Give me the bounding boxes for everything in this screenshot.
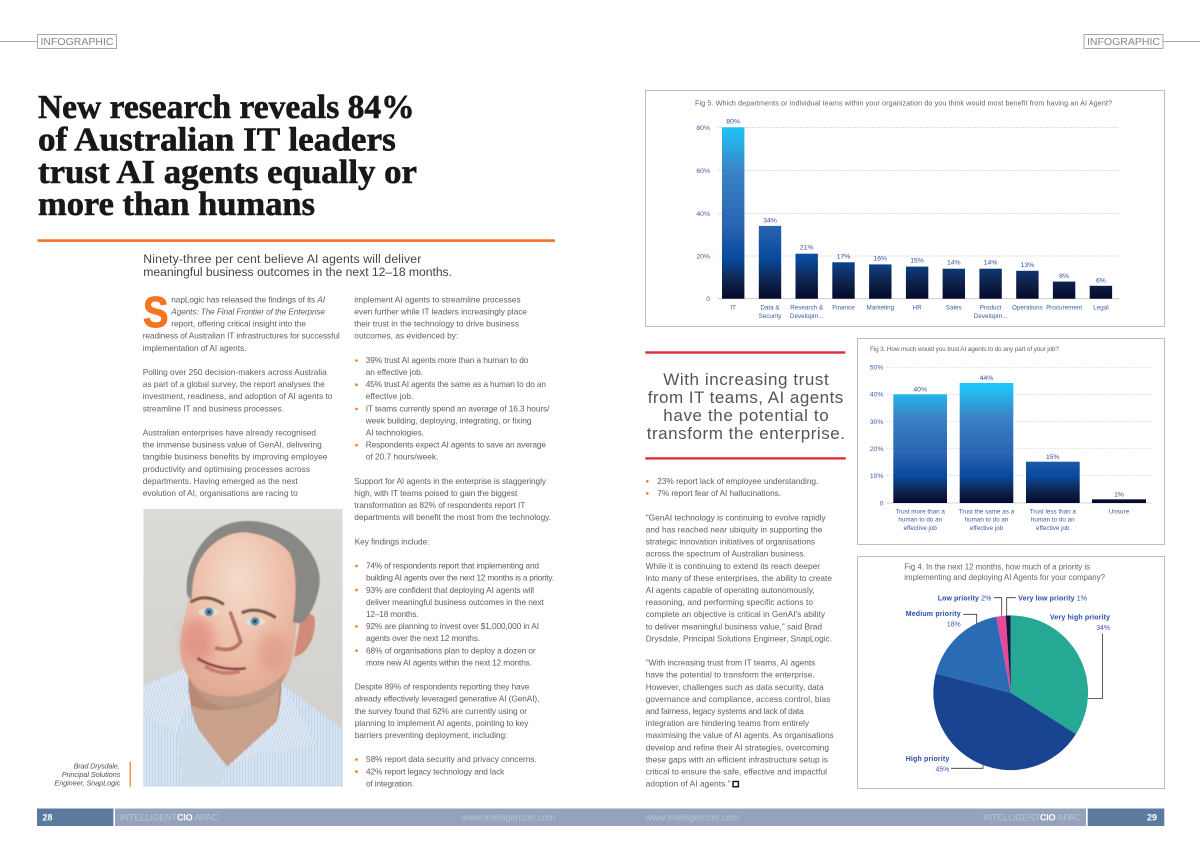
bar categories: effective job bbox=[970, 525, 1004, 532]
text block: polling paragraph bbox=[143, 367, 333, 413]
bullet list: barriers: 42% report legacy technology and lack bbox=[366, 766, 505, 776]
bullet list: key findings: 93% are confident that deploying AI agents will bbox=[366, 585, 534, 595]
bar values: 21% bbox=[800, 245, 814, 252]
bullet list: trust statistics: of 20.7 hours/week. bbox=[366, 452, 438, 462]
bullet list: further barriers: 23% report lack of employee understanding. bbox=[657, 476, 818, 486]
bullet list: key findings: 92% are planning to invest over $1,000,000 in AI bbox=[366, 621, 539, 631]
left website: www.intelligentcio.com bbox=[461, 812, 555, 822]
text block: closing quote: and fairness, legacy systems and lack of data bbox=[646, 706, 804, 716]
title: New research reveals 84% bbox=[38, 89, 415, 126]
text block: column 2 intro: implement AI agents to streamline processes bbox=[354, 294, 521, 304]
bullet list: key findings bbox=[355, 561, 554, 667]
text block: column 2 intro: their trust in the technology to drive business bbox=[354, 319, 519, 329]
bullet list: trust statistics: Respondents expect AI agents to save an average bbox=[366, 440, 546, 450]
text block: closing quote: However, challenges such as data security, data bbox=[646, 682, 824, 692]
caption accent line bbox=[130, 762, 131, 787]
bar categories bbox=[895, 508, 1130, 532]
bullet list: barriers bbox=[355, 754, 537, 788]
section tag: right INFOGRAPHIC: INFOGRAPHIC bbox=[1087, 36, 1160, 48]
bar categories: Unsure bbox=[1109, 508, 1130, 515]
y axis and gridlines: 20% bbox=[870, 446, 884, 453]
y axis and gridlines: 40% bbox=[696, 211, 710, 218]
chart title: Fig 4: Fig 4. In the next 12 months, how much of a priority is bbox=[904, 563, 1090, 572]
orange title rule bbox=[38, 239, 555, 242]
y axis and gridlines: 50% bbox=[870, 365, 884, 372]
red rule below pull quote bbox=[645, 457, 846, 460]
text block: GenAI quote: to deliver meaningful business value," said Brad bbox=[646, 621, 822, 631]
text block: polling paragraph: investment, readiness, and adoption of AI agents to bbox=[143, 391, 333, 401]
end mark square bbox=[733, 782, 738, 787]
text block: intro paragraph: napLogic has released the findings of its AI bbox=[171, 294, 326, 304]
text block: intro paragraph: readiness of Australian IT infrastructures for successful bbox=[143, 331, 340, 341]
text block: column 2 intro bbox=[354, 294, 527, 341]
chart title: Fig 3: Fig 3. How much would you trust AI agents to do any part of your job? bbox=[870, 346, 1059, 353]
text block: barriers paragraph: planning to implement AI agents, pointing to key bbox=[355, 718, 529, 728]
pie labels: High priority bbox=[906, 756, 949, 763]
text block: barriers paragraph bbox=[355, 682, 539, 740]
pie labels: Very high priority bbox=[1050, 614, 1110, 622]
bar categories: Developm... bbox=[974, 313, 1008, 320]
y axis and gridlines bbox=[870, 365, 1152, 507]
title: of Australian IT leaders bbox=[38, 122, 396, 158]
bar categories: Security bbox=[759, 313, 782, 320]
bar values: 44% bbox=[980, 375, 993, 382]
text block: GenAI quote: "GenAI technology is continuing to evolve rapidly bbox=[646, 512, 827, 522]
bar categories: human to do an bbox=[898, 517, 943, 524]
text block: closing quote: critical to ensure the safe, effective and impactful bbox=[646, 766, 827, 776]
bar categories: Data & bbox=[760, 304, 780, 311]
bar values: 14% bbox=[947, 260, 961, 267]
bullet list: trust statistics: week building, deploying, integrating, or fixing bbox=[365, 415, 532, 425]
chart title: Fig 5: Fig 5. Which departments or individual teams within your organization do you think would most benefit from having an AI Agent? bbox=[695, 98, 1112, 107]
bullet list: key findings: 68% of organisations plan to deploy a dozen or bbox=[366, 645, 536, 655]
text block: GenAI quote: across the spectrum of Australian business. bbox=[646, 549, 806, 559]
text block: intro paragraph: Agents: The Final Frontier of the Enterprise bbox=[170, 306, 325, 316]
text block: intro paragraph: implementation of AI agents. bbox=[143, 343, 246, 353]
bar values bbox=[726, 118, 1106, 284]
bar categories bbox=[730, 304, 1109, 320]
pie labels: 34% bbox=[1096, 625, 1110, 632]
pull quote bbox=[647, 370, 845, 443]
text block: GenAI quote: AI agents capable of operating autonomously, bbox=[646, 585, 815, 595]
text block: GenAI quote: While it is continuing to extend its reach deeper bbox=[646, 561, 820, 571]
bullet list: trust statistics: 39% trust AI agents more than a human to do bbox=[366, 355, 529, 365]
bar categories: Marketing bbox=[866, 304, 895, 311]
bar values: 13% bbox=[1021, 262, 1034, 269]
bar values: 1% bbox=[1114, 492, 1124, 499]
text block: GenAI quote: reasoning, and performing specific actions to bbox=[646, 597, 813, 607]
text block: intro paragraph: report, offering critical insight into the bbox=[171, 319, 306, 329]
bars bbox=[893, 383, 1146, 503]
bar categories: human to do an bbox=[965, 517, 1009, 524]
text block: closing quote: develop and refine their AI strategies, overcoming bbox=[646, 742, 829, 752]
pie leader lines bbox=[951, 598, 1102, 768]
text block: closing quote: "With increasing trust from IT teams, AI agents bbox=[646, 658, 815, 668]
text block: enterprises paragraph: the immense business value of GenAI, delivering bbox=[143, 440, 322, 450]
left publication name: INTELLIGENTCIO APAC bbox=[120, 812, 218, 822]
text block: GenAI quote: complete an objective is critical in GenAI's ability bbox=[646, 609, 826, 619]
text block: barriers paragraph: the survey found that 62% are currently using or bbox=[355, 706, 527, 716]
bar values: 16% bbox=[873, 256, 887, 263]
bullet list: trust statistics bbox=[355, 355, 550, 462]
bullet list: barriers: 58% report data security and privacy concerns. bbox=[366, 754, 537, 764]
text block: closing quote: adoption of AI agents." bbox=[646, 779, 731, 789]
text block: support paragraph bbox=[354, 476, 551, 522]
text block: enterprises paragraph: departments. Having emerged as the next bbox=[143, 476, 298, 486]
section tag: right INFOGRAPHIC bbox=[1084, 34, 1200, 48]
bars bbox=[722, 127, 1112, 299]
photo caption: Principal Solutions bbox=[62, 770, 121, 779]
bar categories: Trust less than a bbox=[1030, 508, 1076, 515]
pull quote: With increasing trust bbox=[663, 370, 829, 389]
text block: barriers paragraph: barriers preventing deployment, including: bbox=[355, 730, 507, 740]
text block: closing quote: these gaps with an efficient infrastructure setup is bbox=[646, 754, 828, 764]
title bbox=[38, 89, 417, 223]
bar values: 15% bbox=[1046, 454, 1060, 461]
bar categories: effective job bbox=[1036, 525, 1070, 532]
text block: column 2 intro: even further while IT leaders increasingly place bbox=[354, 306, 527, 316]
left page number bbox=[37, 808, 113, 826]
text block: intro paragraph bbox=[143, 294, 340, 353]
photo: Brad Drysdale portrait bbox=[143, 509, 343, 787]
bar categories: Finance bbox=[832, 304, 855, 311]
text block: closing quote: governance and compliance, access control, bias bbox=[646, 694, 830, 704]
bullet list: further barriers: 7% report fear of AI hallucinations. bbox=[657, 488, 781, 498]
title: more than humans bbox=[38, 186, 315, 223]
bar categories: effective job bbox=[903, 525, 937, 532]
photo caption bbox=[54, 761, 121, 787]
y axis and gridlines: 0 bbox=[880, 500, 884, 507]
pie labels: Low priority 2% bbox=[938, 595, 991, 602]
y axis and gridlines bbox=[696, 125, 1119, 303]
text block: enterprises paragraph bbox=[143, 428, 328, 498]
text block: polling paragraph: Polling over 250 decision-makers across Australia bbox=[143, 367, 327, 377]
bar values: 8% bbox=[1059, 273, 1069, 280]
chart title: Fig 4 bbox=[904, 563, 1106, 582]
bar values: 34% bbox=[763, 217, 777, 224]
right publication name: INTELLIGENTCIO APAC bbox=[983, 812, 1082, 822]
footer bar bbox=[37, 808, 1164, 826]
text block: support paragraph: high, with IT teams poised to gain the biggest bbox=[354, 488, 518, 498]
photo caption: Brad Drysdale, bbox=[74, 761, 120, 770]
text block: closing quote: maximising the value of AI agents. As organisations bbox=[646, 730, 834, 740]
bullet list: trust statistics: 45% trust AI agents the same as a human to do an bbox=[366, 379, 546, 389]
y axis and gridlines: 80% bbox=[696, 125, 710, 132]
pull quote: from IT teams, AI agents bbox=[648, 388, 843, 407]
standfirst: Ninety-three per cent believe AI agents will deliver bbox=[143, 252, 421, 266]
title: trust AI agents equally or bbox=[38, 154, 417, 191]
text block: support paragraph: transformation as 82% of respondents report IT bbox=[354, 500, 525, 510]
bar categories: Sales bbox=[946, 304, 962, 311]
bar categories: Trust the same as a bbox=[959, 508, 1015, 515]
bar categories: HR bbox=[913, 304, 922, 311]
text block: key findings heading: Key findings include: bbox=[355, 536, 429, 546]
text block: column 2 intro: outcomes, as evidenced by: bbox=[354, 331, 458, 341]
pie slices bbox=[933, 615, 1088, 770]
bullet list: trust statistics: IT teams currently spend an average of 16.3 hours/ bbox=[366, 403, 550, 413]
text block: polling paragraph: streamline IT and business processes. bbox=[143, 403, 284, 413]
bullet list: key findings: 74% of respondents report that implementing and bbox=[366, 561, 539, 571]
bullet list: key findings: deliver meaningful business outcomes in the next bbox=[366, 597, 544, 607]
bullet list: trust statistics: an effective job. bbox=[366, 367, 423, 377]
bar values: 15% bbox=[910, 258, 924, 265]
bullet list: further barriers bbox=[646, 476, 818, 498]
bar categories: Trust more than a bbox=[895, 508, 945, 515]
pie labels: Medium priority bbox=[906, 611, 961, 618]
text block: enterprises paragraph: productivity and optimising processes across bbox=[143, 464, 310, 474]
standfirst: meaningful business outcomes in the next 12–18 months. bbox=[143, 265, 452, 279]
bar categories: Legal bbox=[1093, 304, 1109, 311]
left page number: 28 bbox=[42, 812, 53, 822]
right page number: 29 bbox=[1147, 812, 1157, 822]
bar values: 40% bbox=[913, 386, 927, 393]
pie labels: 18% bbox=[947, 621, 961, 628]
panel: Fig 3 bar chart bbox=[858, 338, 1164, 544]
bar values: 6% bbox=[1096, 277, 1106, 284]
standfirst bbox=[143, 252, 452, 279]
bar categories: Procurement bbox=[1046, 304, 1082, 311]
text block: GenAI quote: strategic innovation initiatives of organisations bbox=[646, 537, 815, 547]
text block: enterprises paragraph: Australian enterprises have already recognised bbox=[143, 428, 316, 438]
drop cap S: S bbox=[143, 288, 168, 337]
bullet list: barriers: of integration. bbox=[366, 778, 414, 788]
text block: support paragraph: Support for AI agents in the enterprise is staggeringly bbox=[354, 476, 547, 486]
bullet list: key findings: agents over the next 12 months. bbox=[366, 633, 480, 643]
pie labels: 45% bbox=[936, 766, 949, 774]
panel: Fig 5 bar chart bbox=[646, 90, 1164, 326]
pull quote: transform the enterprise. bbox=[647, 424, 845, 443]
bar categories: Research & bbox=[790, 304, 824, 311]
text block: GenAI quote: into many of these enterprises, the ability to create bbox=[646, 573, 832, 583]
bar categories: Product bbox=[980, 304, 1002, 311]
text block: barriers paragraph: Despite 89% of respondents reporting they have bbox=[355, 682, 530, 692]
text block: GenAI quote: and has reached near ubiquity in supporting the bbox=[646, 524, 823, 534]
text block: closing quote: have the potential to transform the enterprise. bbox=[646, 670, 815, 680]
text block: GenAI quote bbox=[646, 512, 832, 643]
red rule above pull quote bbox=[645, 351, 845, 354]
photo caption: Engineer, SnapLogic bbox=[54, 778, 121, 787]
y axis and gridlines: 40% bbox=[870, 392, 884, 399]
pie labels: Very low priority 1% bbox=[1018, 595, 1087, 602]
y axis and gridlines: 30% bbox=[870, 419, 884, 426]
bar categories: human to do an bbox=[1031, 517, 1075, 524]
bar values: 14% bbox=[984, 260, 997, 267]
bar categories: Developm... bbox=[790, 313, 824, 320]
section tag: left INFOGRAPHIC bbox=[0, 34, 116, 48]
bullet list: trust statistics: effective job. bbox=[366, 391, 413, 401]
chart title: Fig 4: implementing and deploying AI Agents for your company? bbox=[904, 573, 1106, 582]
text block: support paragraph: departments will benefit the most from the technology. bbox=[354, 512, 551, 522]
text block: enterprises paragraph: evolution of AI, organisations are racing to bbox=[143, 488, 298, 498]
y axis and gridlines: 0 bbox=[706, 296, 710, 303]
bullet list: key findings: more new AI agents within the next 12 months. bbox=[366, 657, 532, 667]
y axis and gridlines: 60% bbox=[696, 168, 710, 175]
bar categories: Operations bbox=[1012, 304, 1043, 311]
panel: Fig 4 pie chart bbox=[858, 556, 1164, 788]
y axis and gridlines: 10% bbox=[870, 473, 884, 480]
bar categories: IT bbox=[730, 304, 736, 311]
text block: GenAI quote: Drysdale, Principal Solutions Engineer, SnapLogic. bbox=[646, 633, 832, 643]
bar values bbox=[913, 375, 1124, 499]
text block: closing quote: integration are hindering teams from entirely bbox=[646, 718, 810, 728]
pie labels bbox=[906, 595, 1110, 774]
bar values: 80% bbox=[726, 118, 740, 125]
pull quote: have the potential to bbox=[663, 406, 829, 425]
text block: barriers paragraph: already effectively leveraged generative AI (GenAI), bbox=[355, 694, 539, 704]
right page number bbox=[1088, 808, 1164, 826]
text block: closing quote bbox=[646, 658, 834, 789]
section tag: left INFOGRAPHIC: INFOGRAPHIC bbox=[40, 36, 114, 48]
bullet list: trust statistics: AI technologies. bbox=[366, 428, 424, 438]
right website: www.intelligentcio.com bbox=[645, 812, 739, 822]
bullet list: key findings: building AI agents over the next 12 months is a priority. bbox=[366, 573, 554, 583]
text block: enterprises paragraph: tangible business benefits by improving employee bbox=[143, 452, 328, 462]
text block: polling paragraph: as part of a global survey, the report analyses the bbox=[143, 379, 325, 389]
bar values: 17% bbox=[837, 253, 850, 260]
bullet list: key findings: 12–18 months. bbox=[366, 609, 419, 619]
y axis and gridlines: 20% bbox=[696, 254, 710, 261]
